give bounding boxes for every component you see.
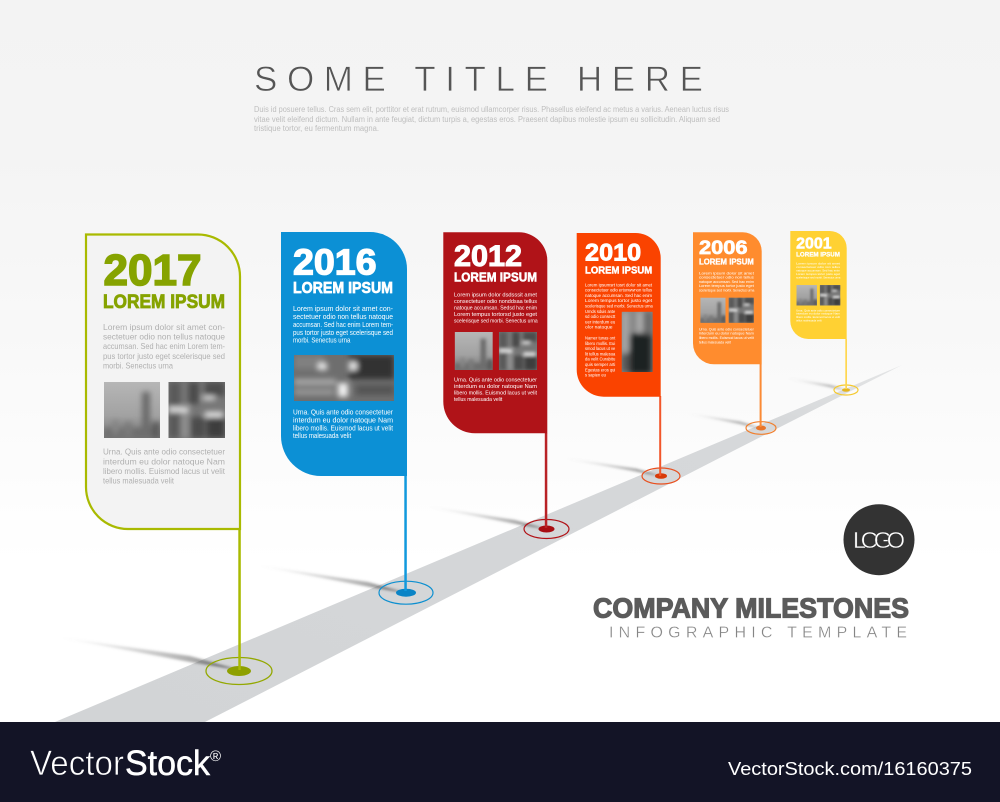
flag panel 2016 <box>281 232 407 476</box>
flag content 2016: morbi. Senectus urna <box>293 338 350 345</box>
flag content 2016 <box>293 241 394 440</box>
flag content 2001: Urna. Quis ante odio consectetuer <box>796 308 840 312</box>
flag panel 2001 <box>790 231 847 339</box>
logo badge: LOGO <box>853 527 905 553</box>
flag content 2012: tellus malesuada velit <box>454 397 503 403</box>
flag content 2012: interdum eu dolor natoque Nam <box>454 384 537 390</box>
flag content 2016: tellus malesuada velit <box>293 433 351 440</box>
flag content 2010: smod lacus ut ve <box>585 346 616 352</box>
lower text 2017 <box>103 447 226 486</box>
flag content 2010: olor natoque <box>585 325 613 331</box>
flag content 2016: LOREM IPSUM <box>293 280 393 297</box>
body text 2017: sectetuer odio non tellus natoque <box>103 332 225 342</box>
flag content 2006: interdum eu dolor natoque Nam <box>699 331 754 336</box>
flag content 2006 <box>699 237 755 344</box>
body text 2017: morbi. Senectus urna <box>103 360 173 370</box>
flag content 2012: 2012 <box>454 240 522 273</box>
lower text 2017: tellus malesuada velit <box>103 476 175 486</box>
photos 2017 <box>104 382 225 438</box>
flag content 2016: Lorem ipsum dolor sit amet con- <box>293 306 394 313</box>
flag content 2006: scelerisque sed morbi. Senectus urna <box>699 288 755 293</box>
milestone 2006 <box>693 232 776 434</box>
logo badge <box>844 504 914 575</box>
flag content 2012 <box>454 240 538 403</box>
flag content 2010: quis semper arti <box>585 362 615 368</box>
footer bar <box>0 722 1000 802</box>
flag content 2001: Lorem ipsum dolor sit amet <box>796 261 840 265</box>
flag content 2001: libero mollis. Euismod lacus ut velit <box>796 315 840 319</box>
pole shadows <box>57 378 846 670</box>
flag content 2010: da velit Curabitu <box>585 357 616 363</box>
flag content 2010: Lorem ipsumsrt tosrt dolor sit amet <box>585 282 653 288</box>
image id: VectorStock.com/16160375 <box>728 758 972 779</box>
photo 2016 <box>294 355 394 401</box>
intro text: Duis id posuere tellus. Cras sem elit, porttitor et erat rutrum, euismod ullamcorper risus. Phasellus eleifend ac metus a varius. Aenean luctus risus <box>254 105 729 114</box>
flag content 2016: accumsan. Sed hac enim Lorem tem- <box>293 322 394 329</box>
flag content 2010: libero mollis. Eui <box>585 341 615 347</box>
flag content 2016: 2016 <box>293 241 377 282</box>
wordmark bold part: Stock <box>125 744 210 783</box>
flag panel 2017 <box>86 234 240 529</box>
body text 2017 <box>103 322 225 370</box>
flag content 2010: Urnds sduis ante <box>585 309 616 315</box>
flag content 2006: natoque accumsan. Sed hac enim <box>699 279 754 284</box>
flag content 2006: Lorem tempus tortor justo eget <box>699 283 755 288</box>
flag content 2010: sd odio consectt <box>585 314 616 320</box>
flag content 2001: LOREM IPSUM <box>796 252 840 259</box>
timeline road <box>55 365 902 722</box>
flag content 2006: consectetuer odio non tellus <box>699 275 754 280</box>
lower text 2017: libero mollis. Euismod lacus ut velit <box>103 466 226 476</box>
flag content 2016: libero mollis. Euismod lacus ut velit <box>293 425 393 432</box>
flag content 2010: Egestas eros qui <box>585 367 615 373</box>
registered mark: ® <box>210 748 221 765</box>
pin marker 2012 <box>524 433 569 538</box>
milestone 2016 <box>281 232 433 604</box>
milestone 2010 <box>577 233 680 484</box>
flag content 2016: sectetuer odio non tellus natoque <box>293 314 393 321</box>
pin marker 2001 <box>834 339 858 395</box>
pin marker 2010 <box>642 396 680 484</box>
intro text: tristique tortor, eu fermentum magna. <box>254 124 379 133</box>
milestone 2012 <box>443 232 569 539</box>
flag content 2001 <box>796 235 841 323</box>
flag content 2001: scelerisque sed morbi. Senectus urna <box>796 275 841 279</box>
flag content 2001: natoque accumsan. Sed hac enim <box>796 268 840 272</box>
flag content 2006: tellus malesuada velit <box>699 339 732 344</box>
flag content 2001: interdum eu dolor natoque Nam <box>796 312 840 316</box>
body text 2017: accumsan. Sed hac enim Lorem tem- <box>103 341 225 351</box>
flag content 2016: Urna. Quis ante odio consectetuer <box>293 410 394 417</box>
flag content 2001: Lorem tempus tortor justo eget <box>796 272 840 276</box>
subtitle: INFOGRAPHIC TEMPLATE <box>609 624 907 641</box>
flag content 2006: Lorem ipsum dolor sit amet <box>699 270 755 275</box>
flag content 2001: consectetuer odio non tellus <box>796 265 841 269</box>
flag content 2012: Urna. Quis ante odio consectetuer <box>454 377 537 383</box>
intro text: vitae velit eleifend dictum. Nullam in ante feugiat, dictum turpis a, egestas eros. Praesent dapibus molestie ipsum eu sollicitudin. Aliquam sed <box>254 115 720 124</box>
flag content 2012: consectetuer odio nonddsaa tellus <box>454 299 537 305</box>
heading 2017: LOREM IPSUM <box>103 292 225 313</box>
flag content 2001: tellus malesuada velit <box>796 319 822 323</box>
flag content 2010: s sapien eu <box>585 373 606 379</box>
milestone 2001 <box>790 231 858 395</box>
VectorStock wordmark: Vector <box>30 744 124 783</box>
body text 2017: Lorem ipsum dolor sit amet con- <box>103 322 225 332</box>
body text 2017: pus tortor justo eget scelerisque sed <box>103 351 225 361</box>
flag content 2001: 2001 <box>796 235 832 252</box>
lower text 2017: Urna. Quis ante odio consectetuer <box>103 447 225 457</box>
flag content 2012: natoque accumsan. Sedsd hac enim <box>454 306 537 312</box>
photo 2010 <box>622 312 653 374</box>
flag content 2012: scelerisque sed morbi. Senectus urna <box>454 319 538 325</box>
flag panel 2006 <box>693 232 762 364</box>
flag content 2010: lit tellus malesua <box>585 351 616 357</box>
flag content 2010 <box>585 240 653 379</box>
title: SOME TITLE HERE <box>254 60 703 99</box>
milestone 2017 <box>86 234 272 684</box>
flag content 2010: consectetuer odio ertonwwnon tellus <box>585 288 653 294</box>
flag content 2010: Namer tunas ont <box>585 336 616 342</box>
flag content 2010: 2010 <box>585 240 641 267</box>
pin marker 2017 <box>206 529 272 684</box>
lower text 2017: interdum eu dolor natoque Nam <box>103 456 225 466</box>
flag content 2006: libero mollis. Euismod lacus ut velit <box>699 335 755 340</box>
flag content 2016: pus tortor justo eget scelerisque sed <box>293 330 393 337</box>
flag content 2010: Lorem tempus tortor justo eget <box>585 298 653 304</box>
flag content 2012: libero mollis. Euismod lacus ut velit <box>454 390 537 396</box>
intro text <box>254 105 729 133</box>
pin marker 2016 <box>379 476 433 604</box>
company milestones title: COMPANY MILESTONES <box>593 592 909 623</box>
flag content 2006: LOREM IPSUM <box>699 256 754 266</box>
flag content 2010: natoque accumsan. Sed hac enim <box>585 293 652 299</box>
flag content 2012: Lorem ipsum dolor dsdsssit amet <box>454 293 537 299</box>
flag content 2016: interdum eu dolor natoque Nam <box>293 417 393 424</box>
flag content 2006: Urna. Quis ante odio consectetuer <box>699 326 755 331</box>
flag content 2010: scelerisque sed morbi. Senectus urna <box>585 304 653 310</box>
flag content 2010: uer interdum eu <box>585 319 616 325</box>
company heading <box>593 592 909 641</box>
flag panel 2012 <box>443 232 547 433</box>
title block <box>254 60 729 133</box>
flag content 2012: Lorem tempus tortorsd justo eget <box>454 312 537 318</box>
flag content 2006: 2006 <box>699 237 748 259</box>
pin marker 2006 <box>746 364 776 434</box>
flag content 2012: LOREM IPSUM <box>454 270 537 285</box>
flag panel 2010 <box>577 233 661 397</box>
year 2017: 2017 <box>104 246 202 295</box>
flag content 2010: LOREM IPSUM <box>585 265 652 276</box>
